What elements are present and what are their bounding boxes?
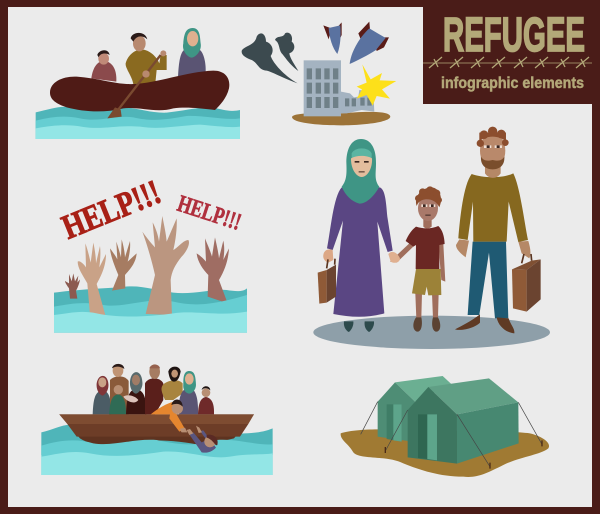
barbed wire divider: [423, 57, 592, 68]
water back: [54, 286, 247, 333]
panel: drowning hands calling for help: [54, 173, 247, 333]
water middle: [41, 440, 273, 475]
child passenger: [91, 50, 116, 82]
hand tan: [78, 243, 106, 315]
tent guy ropes and pegs: [361, 402, 542, 469]
panel: rescue boat: [41, 364, 273, 475]
man: [455, 127, 530, 333]
crowd of refugees: [93, 364, 214, 414]
woman in hijab: [178, 28, 206, 77]
rubber boat hull: [50, 71, 229, 111]
hand large: [142, 216, 189, 315]
subtitle: infographic elements: [441, 75, 584, 92]
missile left: [323, 22, 342, 54]
ground shadow: [313, 316, 550, 349]
panel: title: [423, 0, 600, 104]
woman's shoes: [344, 321, 374, 332]
rescuer in orange: [151, 400, 187, 432]
text: HELP large: HELP!!!: [57, 173, 166, 247]
missile right: [350, 22, 389, 64]
panel: bombed building: [242, 22, 396, 125]
ruined wing: [341, 90, 374, 113]
water front: [54, 312, 247, 333]
sandy ground: [341, 429, 549, 477]
boy: [388, 186, 445, 332]
panel: family in rowing boat: [36, 28, 240, 139]
person in water: [187, 426, 218, 453]
man's suitcase: [512, 254, 541, 312]
man paddling: [126, 33, 167, 84]
water: [36, 107, 240, 139]
boat hull: [59, 414, 254, 446]
woman: [323, 139, 393, 317]
ground: [292, 112, 390, 125]
rear tent: [378, 376, 452, 442]
paddle: [107, 55, 161, 118]
front tent: [408, 378, 519, 464]
water middle: [54, 295, 247, 333]
water front: [41, 451, 273, 475]
smoke clouds: [242, 33, 298, 83]
panel: refugee family: [313, 127, 550, 349]
hand mauve: [197, 237, 229, 303]
hand small: [65, 273, 80, 299]
hand brown: [110, 239, 137, 291]
text: HELP small: HELP!!!: [174, 191, 244, 236]
tower building: [304, 60, 341, 116]
explosion: [357, 64, 396, 106]
panel: refugee camp tents: [341, 376, 549, 477]
water back: [41, 425, 273, 455]
woman's suitcase: [318, 259, 336, 304]
